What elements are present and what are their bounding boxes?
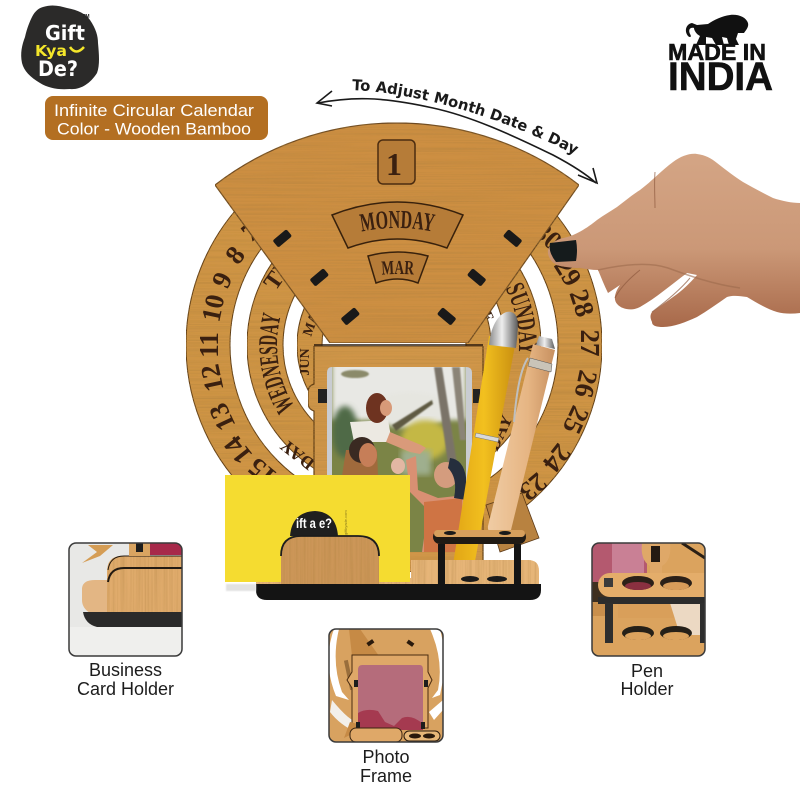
product label: Infinite Circular Calendar xyxy=(54,101,254,120)
calendar front wedge panel xyxy=(215,122,579,343)
calendar outer date ring: 30 xyxy=(528,216,568,256)
calendar month ring xyxy=(297,248,496,442)
panel: pen holder detail xyxy=(592,543,718,656)
caption: business card holder: Card Holder xyxy=(77,679,174,699)
month window xyxy=(367,251,429,284)
calendar outer date ring: 26 xyxy=(569,368,603,400)
calendar day ring xyxy=(247,253,541,474)
calendar outer date ring: 25 xyxy=(557,401,595,439)
calendar outer date ring: 9 xyxy=(206,268,238,292)
calendar outer date ring: 24 xyxy=(537,438,577,478)
calendar outer date ring xyxy=(186,137,605,553)
stand base xyxy=(256,560,541,600)
man with child xyxy=(342,450,378,476)
panel: photo frame detail xyxy=(328,629,447,742)
arrow: adjust month date and day xyxy=(315,79,598,184)
calendar day ring: TU xyxy=(259,253,299,295)
product label: Color - Wooden Bamboo xyxy=(57,120,251,138)
black slots xyxy=(273,229,522,326)
calendar month ring: JUN xyxy=(298,348,313,376)
icon: lion xyxy=(686,15,748,45)
business card xyxy=(225,475,410,582)
caption: business card holder xyxy=(77,660,174,699)
caption: photo frame: Frame xyxy=(360,766,412,786)
hand turning the dial xyxy=(548,154,800,327)
calendar day ring: DAY xyxy=(276,435,318,474)
caption: photo frame xyxy=(360,747,412,786)
calendar outer date ring: 14 xyxy=(218,430,258,470)
logo: Gift Kya De: Gift xyxy=(45,21,85,45)
photo frame xyxy=(308,345,489,572)
logo: Gift Kya De: Kya xyxy=(35,42,67,60)
made in india badge xyxy=(668,15,773,99)
woman xyxy=(406,456,466,552)
business card holder xyxy=(281,536,379,584)
business card: ift a e? xyxy=(296,515,332,531)
month window: MAR xyxy=(381,260,414,275)
nail polish xyxy=(550,240,577,262)
caption: pen holder: Holder xyxy=(620,679,674,699)
calendar outer date ring: 10 xyxy=(196,292,230,324)
logo: Gift Kya De xyxy=(21,5,99,89)
calendar outer date ring: 11 xyxy=(194,332,224,358)
calendar day ring: WEDNESDAY xyxy=(259,312,293,416)
calendar month ring: F xyxy=(479,309,496,324)
calendar outer date ring: 15 xyxy=(242,452,282,492)
made in india badge: INDIA xyxy=(668,55,773,99)
calendar outer date ring: 12 xyxy=(195,362,229,394)
calendar outer date ring: 23 xyxy=(513,467,553,507)
made in india badge: MADE IN xyxy=(668,39,766,65)
date window: 1 xyxy=(386,146,402,182)
calendar day ring: DAY xyxy=(483,411,517,454)
panel: business card holder detail xyxy=(69,543,182,656)
pen holder xyxy=(433,530,526,584)
day window: MONDAY xyxy=(359,210,436,232)
logo: Gift Kya De: TM xyxy=(82,14,90,20)
date window xyxy=(378,140,415,184)
caption: photo frame: Photo xyxy=(362,747,410,767)
calendar outer date ring: 7 xyxy=(235,216,265,248)
rear support piece xyxy=(486,493,539,552)
business card: giftkyade.com xyxy=(343,510,348,535)
card shadow xyxy=(226,584,256,591)
calendar outer date ring: 29 xyxy=(548,253,588,291)
arrow: adjust month date and day: To Adjust Month Date & Day xyxy=(352,79,578,156)
caption: pen holder xyxy=(620,661,674,699)
calendar outer date ring: 27 xyxy=(575,330,605,356)
calendar outer date ring: 28 xyxy=(564,286,600,320)
logo: Gift Kya De: De? xyxy=(38,57,78,81)
calendar month ring: MA xyxy=(301,310,323,338)
calendar day ring: SUNDAY xyxy=(506,282,537,352)
wooden pen xyxy=(488,336,555,536)
day window xyxy=(331,201,464,249)
calendar outer date ring: 8 xyxy=(219,240,251,270)
family photo xyxy=(329,360,467,552)
calendar outer date ring: 13 xyxy=(203,398,241,436)
caption: business card holder: Business xyxy=(89,660,162,680)
product label xyxy=(45,96,268,140)
yellow pen xyxy=(452,312,518,581)
caption: pen holder: Pen xyxy=(631,661,663,681)
